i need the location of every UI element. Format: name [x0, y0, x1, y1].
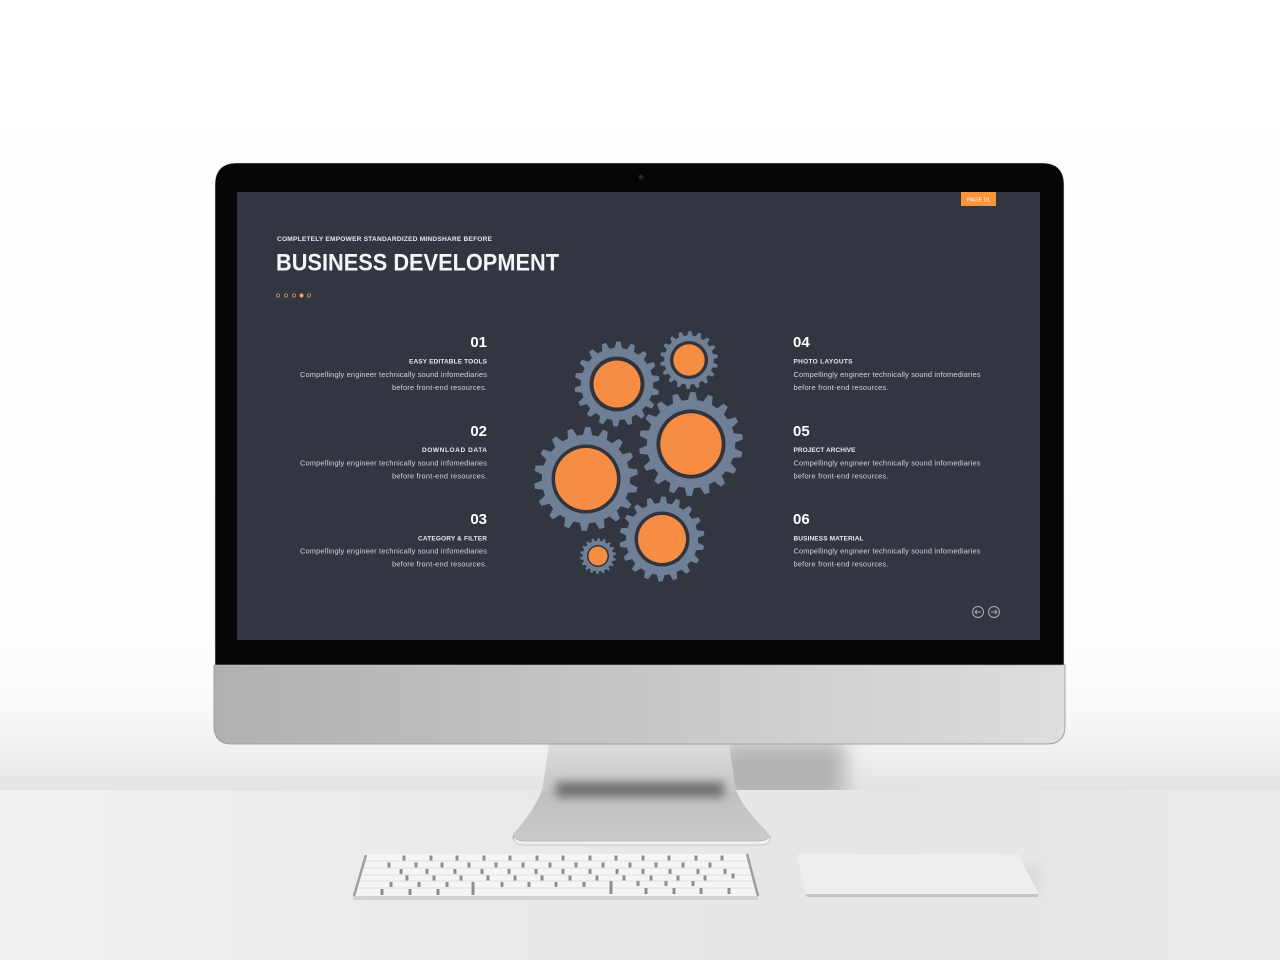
keyboard row lines — [356, 861, 755, 888]
gear 4 — [534, 427, 638, 531]
item 01: EASY EDITABLE TOOLS — [409, 358, 488, 366]
item 04: 04 — [793, 334, 810, 351]
item 02: before front-end resources. — [392, 472, 487, 480]
stand foot — [512, 790, 770, 842]
icon: previous arrow — [972, 606, 984, 618]
background: desk — [0, 790, 1280, 960]
page tag — [961, 192, 996, 206]
monitor bezel — [215, 163, 1064, 665]
item 03: 03 — [470, 511, 487, 528]
gear 1 — [574, 341, 660, 427]
keyboard base — [353, 896, 758, 900]
monitor stand — [512, 744, 770, 845]
item 02: 02 — [470, 423, 487, 440]
screen slide — [237, 192, 1040, 640]
item 03: before front-end resources. — [392, 560, 487, 568]
item 01: 01 — [470, 334, 487, 351]
item 03 — [300, 511, 487, 568]
item 05: Compellingly engineer technically sound infomediaries — [794, 458, 981, 468]
item 02 — [300, 423, 487, 480]
pagination dots — [276, 294, 311, 298]
item 02: DOWNLOAD DATA — [422, 447, 487, 454]
trackpad surface — [797, 854, 1038, 894]
title: BUSINESS DEVELOPMENT — [276, 250, 559, 276]
stand rim — [513, 836, 770, 845]
trackpad — [797, 854, 1040, 897]
item 02: Compellingly engineer technically sound infomediaries — [300, 458, 487, 468]
webcam — [638, 174, 644, 180]
item 05 — [793, 423, 981, 480]
keyboard surface — [353, 854, 757, 896]
keyboard — [353, 854, 758, 900]
item 04 — [793, 334, 981, 392]
wall shadow behind stand — [720, 742, 845, 802]
item 04: Compellingly engineer technically sound infomediaries — [794, 370, 981, 379]
page tag: PAGE 01 — [967, 198, 990, 204]
item 01: Compellingly engineer technically sound infomediaries — [300, 370, 487, 379]
item 06: before front-end resources. — [794, 560, 888, 568]
item 03: CATEGORY & FILTER — [418, 536, 487, 542]
item 04: before front-end resources. — [794, 383, 888, 392]
item 06: Compellingly engineer technically sound infomediaries — [794, 546, 981, 556]
item 03: Compellingly engineer technically sound infomediaries — [300, 546, 487, 556]
gear 2 — [660, 331, 718, 389]
trackpad rim — [806, 894, 1038, 897]
monitor chin — [214, 665, 1065, 744]
item 06: BUSINESS MATERIAL — [794, 536, 864, 542]
keyboard key gaps — [382, 856, 733, 895]
monitor — [214, 163, 1065, 744]
icon: next arrow — [988, 606, 1000, 618]
keyboard side edges — [354, 854, 758, 896]
gear 5 — [619, 496, 705, 582]
gear 3 — [639, 392, 743, 496]
stand shadow band — [556, 782, 724, 797]
keyboard spacebar edges — [473, 881, 611, 895]
item 05: before front-end resources. — [794, 472, 888, 480]
subtitle: COMPLETELY EMPOWER STANDARDIZED MINDSHARE BEFORE — [277, 236, 493, 243]
item 06 — [793, 511, 981, 568]
item 06: 06 — [793, 511, 810, 528]
trackpad shadow — [1020, 866, 1040, 894]
item 01: before front-end resources. — [392, 383, 487, 392]
item 05: PROJECT ARCHIVE — [794, 447, 856, 454]
gears illustration — [534, 331, 743, 582]
stand neck — [542, 744, 736, 792]
item 04: PHOTO LAYOUTS — [794, 358, 853, 366]
item 01 — [300, 334, 488, 392]
item 05: 05 — [793, 423, 810, 440]
gear 6 — [580, 538, 616, 574]
